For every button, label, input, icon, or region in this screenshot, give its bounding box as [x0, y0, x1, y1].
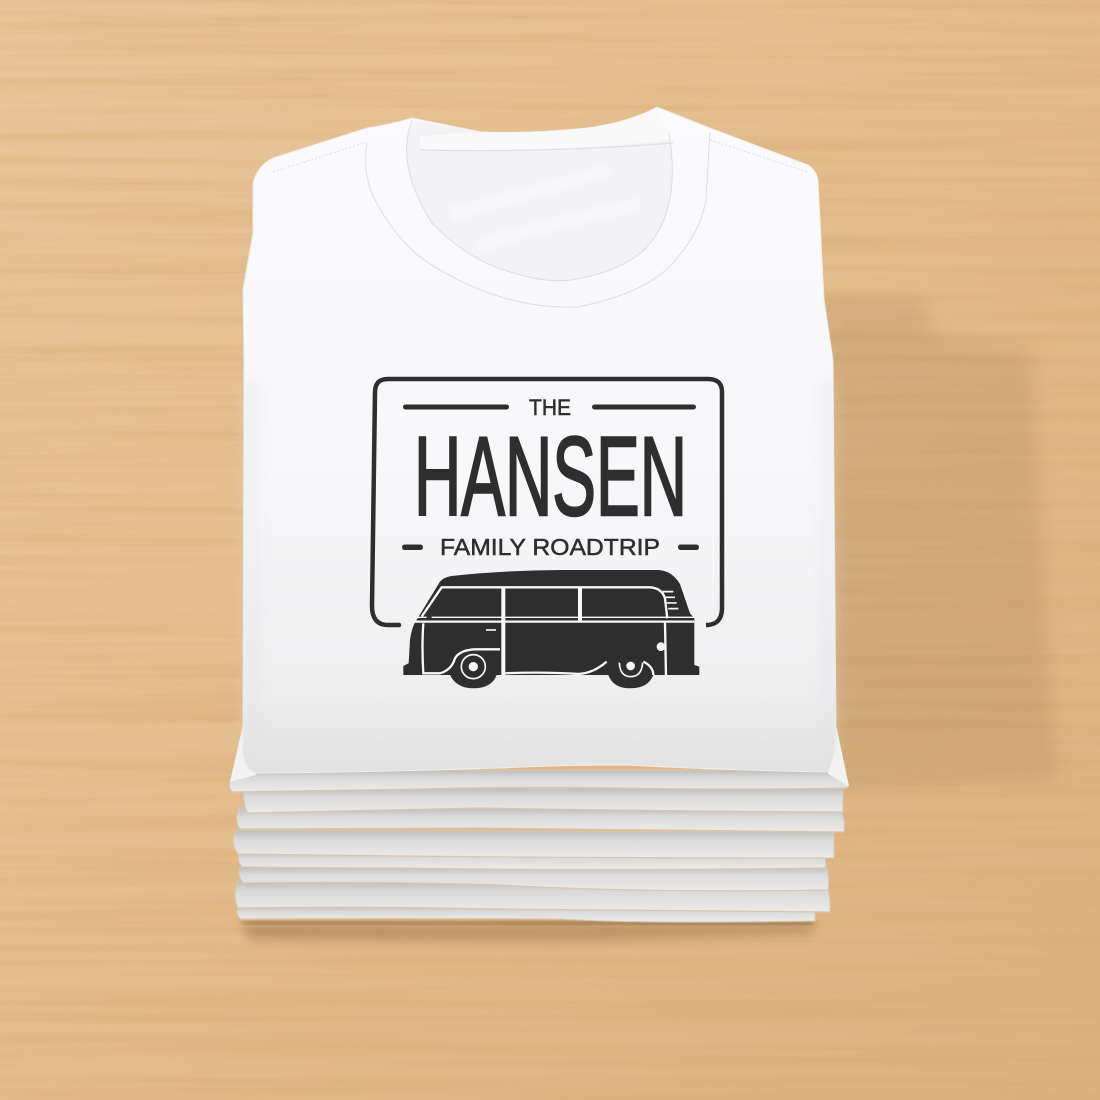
back collar band — [420, 111, 673, 150]
folded layer 1 side edges — [230, 725, 849, 786]
van vent slats — [663, 592, 678, 609]
cast shadow on table — [238, 297, 1058, 942]
heading line: THE: THE — [529, 395, 571, 420]
family name: HANSEN: HANSEN — [414, 414, 687, 539]
folded layer 1 — [229, 770, 849, 792]
rear wheel — [619, 662, 643, 677]
folded layer 4 — [233, 830, 834, 858]
collar seams — [273, 120, 808, 307]
folded layer 3 — [236, 808, 844, 832]
heading line: THE — [403, 395, 696, 420]
folded layer 8 — [237, 906, 815, 922]
van fuel cap — [657, 642, 665, 651]
shirt print: family roadtrip logo — [372, 379, 722, 688]
subheading: FAMILY ROADTRIP — [402, 534, 699, 560]
subheading: FAMILY ROADTRIP: FAMILY ROADTRIP — [440, 534, 660, 560]
soft fold highlights — [450, 170, 640, 245]
logo frame — [372, 379, 722, 625]
van body — [403, 570, 699, 688]
van window and panel lines — [415, 587, 694, 675]
front wheel — [461, 655, 485, 679]
folded layer 7 — [235, 881, 830, 912]
stack of folded shirts — [229, 725, 849, 922]
icon: camper van — [403, 570, 699, 688]
folded layer 2 — [243, 788, 843, 813]
top folded t-shirt — [243, 107, 836, 773]
inside back of neck — [407, 120, 672, 281]
side shading — [246, 380, 833, 760]
folded layer 5 — [238, 852, 826, 870]
folded layer 6 — [239, 866, 829, 891]
